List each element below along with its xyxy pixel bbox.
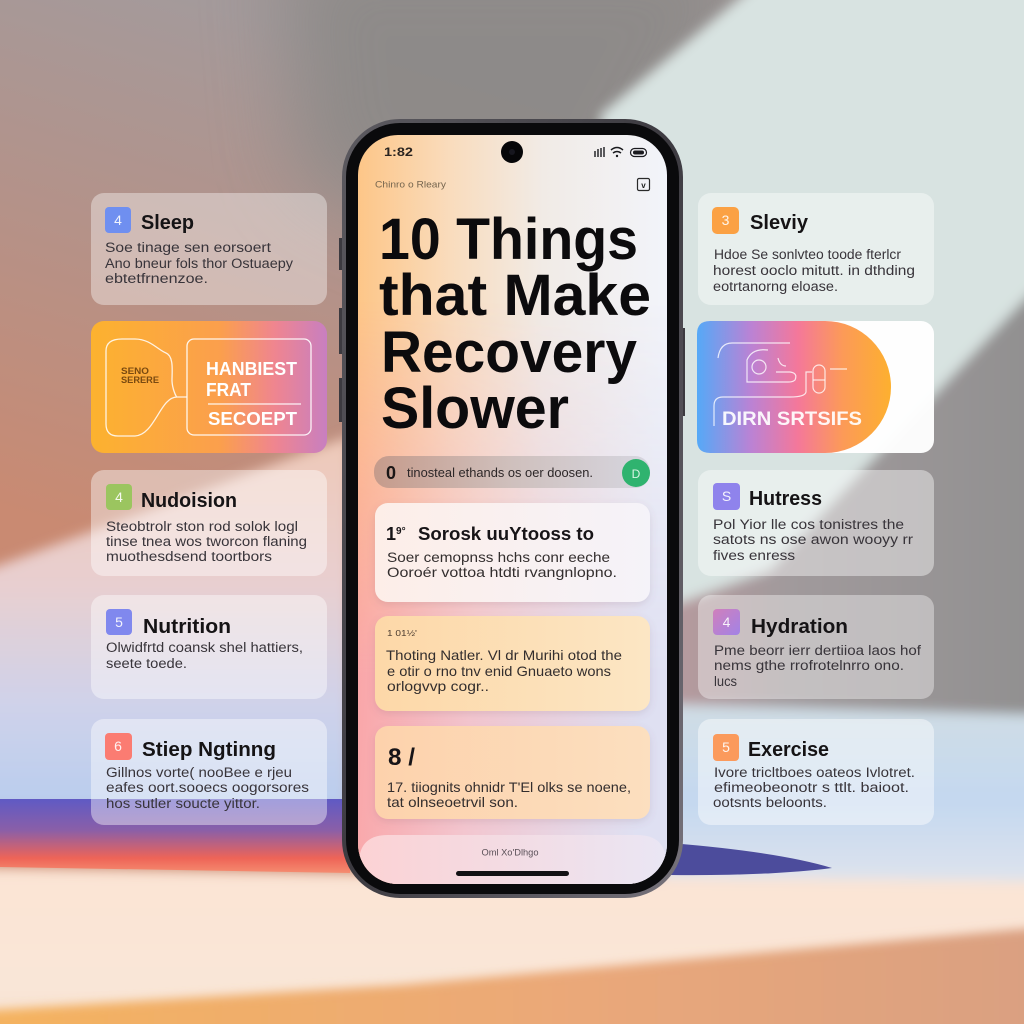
text block: Stiep Ngtinng: eafes oort.sooecs oogorsores [106, 780, 309, 795]
card: Thoting: 1 01½' [387, 628, 417, 638]
card: 8: tat olnseoetrvil son. [387, 794, 518, 810]
summary pill: 0 [386, 463, 396, 483]
card: Sorosk: 9° [396, 526, 406, 537]
card: Thoting: orlogvvp cogr.. [387, 678, 489, 694]
icon: Hydration number [713, 609, 740, 635]
app header label: Chinro o Rleary [375, 180, 446, 190]
diagram small label: SENO [121, 366, 149, 376]
text block: Sleep: Ano bneur fols thor Ostuaepy [105, 256, 293, 271]
phone body [344, 121, 681, 896]
card: Sorosk: Soer cemopnss hchs conr eeche [387, 549, 610, 565]
diagram small label: SERERE [121, 375, 159, 385]
text block: Sleep: ebtetfrnenzoe. [105, 271, 208, 286]
diagram small label [121, 366, 159, 385]
panel: Hutress [698, 470, 934, 576]
text block: Nudoision: tinse tnea wos tworcon flaning [106, 534, 307, 549]
panel: Sleep [91, 193, 327, 305]
panel: gradient illustration right [697, 321, 934, 453]
text block: Exercise [713, 765, 915, 810]
phone [339, 121, 685, 896]
heading: Nutrition: Nutrition [143, 616, 231, 638]
title: Recovery [381, 320, 637, 385]
icon: Stiep number [105, 733, 132, 760]
bottom bar: Oml Xo'Dlhgo [482, 848, 538, 858]
card: Sorosk: Sorosk uuYtooss to [418, 524, 594, 544]
diagram label box: HANBIEST [206, 359, 297, 379]
text block: Hydration: Pme beorr ierr dertiioa laos hof [714, 643, 921, 658]
title: that Make [379, 263, 651, 328]
bottom bar [359, 835, 666, 884]
icon: Hydration number: 4 [723, 614, 731, 630]
text block: Exercise: Ivore tricltboes oateos Ivlotret. [714, 765, 915, 780]
text block: Nudoision: muothesdsend toortbors [106, 549, 272, 564]
text block: Nudoision: Steobtrolr ston rod solok logl [106, 519, 298, 534]
text block: Exercise: efimeobeonotr s ttlt. baioot. [714, 780, 909, 795]
status bar time: 1:82 [384, 145, 413, 159]
camera [501, 141, 523, 163]
diagram outline shape [106, 339, 187, 436]
text block: Sleviy [713, 247, 915, 294]
card: Sorosk: Ooroér vottoa htdti rvangnlopno. [387, 564, 617, 580]
card: Thoting: Thoting Natler. Vl dr Murihi otod the [386, 647, 622, 663]
text block: Sleviy: Hdoe Se sonlvteo toode fterlcr [714, 247, 902, 262]
phone shadow [670, 843, 832, 875]
icon: Nutrition number [106, 609, 132, 635]
illustration label: DIRN SRTSIFS [722, 409, 862, 430]
text block: Hutress [713, 517, 914, 563]
card: 8: 8 / [388, 744, 415, 771]
summary pill: tinosteal ethands os oer doosen. [407, 466, 593, 480]
title [379, 207, 651, 441]
app header icon [638, 178, 650, 190]
app header icon: v [641, 181, 646, 190]
text block: Sleviy: horest ooclo mitutt. in dthding [713, 263, 915, 278]
summary pill [374, 456, 650, 488]
text block: Hydration [714, 643, 921, 689]
icon: green action button [622, 459, 650, 487]
card: Sorosk: 1 [386, 524, 396, 544]
icon: Hutress number [713, 483, 740, 510]
title: Slower [381, 376, 569, 441]
title: 10 Things [379, 207, 638, 272]
diagram label box [187, 339, 311, 435]
text block: Hutress: Pol Yior lle cos tonistres the [713, 517, 904, 532]
card: 8 [375, 726, 650, 819]
icon: Sleep number: 4 [114, 212, 122, 228]
phone side buttons [339, 238, 685, 422]
panel: Stiep Ngtinng [91, 719, 327, 825]
home indicator [456, 871, 569, 876]
diagram label box: FRAT [206, 380, 251, 400]
panel: Nudoision [91, 470, 327, 576]
text block: Sleep [105, 240, 293, 286]
line art icon [714, 343, 847, 426]
text block: Stiep Ngtinng [106, 765, 309, 811]
icon: Nudoision number [106, 484, 132, 510]
panel: Sleviy [698, 193, 934, 305]
icon: green action button: D [632, 467, 641, 481]
card: Sorosk [375, 503, 650, 602]
heading: Hydration: Hydration [751, 616, 848, 638]
card: 8: 17. tiiognits ohnidr T'El olks se noene, [387, 779, 631, 795]
panel: gradient diagram left [91, 321, 327, 453]
icon: Exercise number: 5 [722, 739, 730, 755]
text block: Nutrition [106, 640, 303, 671]
text block: Stiep Ngtinng: Gillnos vorte( nooBee e rjeu [106, 765, 292, 780]
status icons [595, 147, 646, 157]
icon: Hutress number: S [722, 488, 731, 504]
text block: Hutress: satots ns ose awon wooyy rr [713, 532, 914, 547]
heading: Hutress: Hutress [749, 488, 822, 510]
heading: Sleviy: Sleviy [750, 212, 809, 234]
card: Thoting [375, 616, 650, 711]
text block: Stiep Ngtinng: hos sutler soucte yittor. [106, 796, 260, 811]
icon: Sleviy number: 3 [722, 212, 730, 228]
text block: Hydration: nems gthe rrofrotelnrro ono. [714, 658, 904, 673]
icon: Sleviy number [712, 207, 739, 234]
diagram label box: SECOEPT [208, 409, 297, 429]
panel: Exercise [698, 719, 934, 825]
icon: Sleep number [105, 207, 131, 233]
text block: Sleep: Soe tinage sen eorsoert [105, 240, 271, 255]
icon: Stiep number: 6 [114, 738, 122, 754]
phone screen [358, 135, 667, 884]
heading: Sleep: Sleep [141, 212, 194, 234]
text block: Nutrition: Olwidfrtd coansk shel hattiers, [106, 640, 303, 655]
panel: Nutrition [91, 595, 327, 699]
text block: Sleviy: eotrtanorng eloase. [713, 279, 838, 294]
text block: Hydration: lucs [714, 674, 737, 689]
card: Thoting: e otir o rno tnv enid Gnuaeto wons [387, 663, 611, 679]
icon: Nudoision number: 4 [115, 489, 123, 505]
text block: Nudoision [106, 519, 307, 564]
heading: Exercise: Exercise [748, 739, 829, 761]
text block: Nutrition: seete toede. [106, 656, 187, 671]
heading: Nudoision: Nudoision [141, 490, 237, 512]
icon: Nutrition number: 5 [115, 614, 123, 630]
heading: Stiep Ngtinng: Stiep Ngtinng [142, 739, 276, 761]
panel: Hydration [698, 595, 934, 699]
text block: Exercise: ootsnts beloonts. [713, 795, 827, 810]
icon: Exercise number [713, 734, 739, 761]
text block: Hutress: fives enress [713, 548, 795, 563]
